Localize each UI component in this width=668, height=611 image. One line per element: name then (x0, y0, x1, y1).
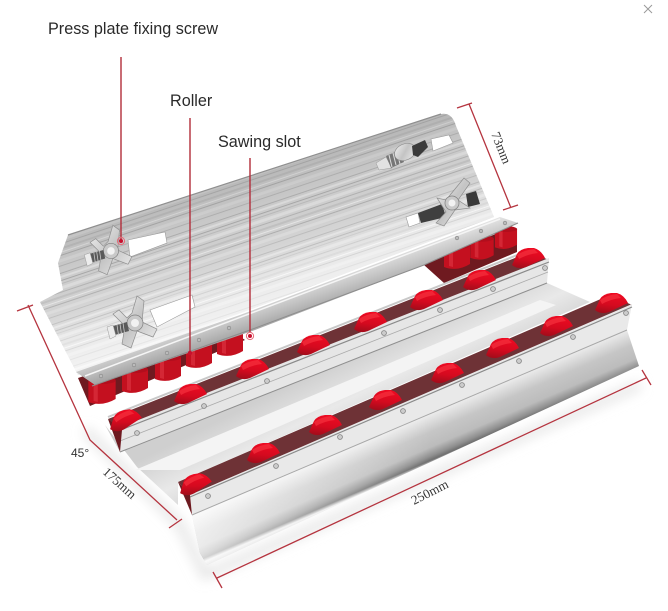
callout: sawing slot (218, 133, 301, 340)
front rail (178, 295, 632, 515)
slot opening (95, 268, 448, 418)
icon: wing screw 2 (107, 296, 157, 348)
label: 45 degrees: 45° (71, 446, 89, 460)
back rollers (88, 226, 517, 404)
icon: close cross (644, 5, 652, 13)
plate slots (128, 135, 453, 327)
base plate (105, 283, 590, 505)
lower folded face (192, 330, 639, 565)
dimension: 175mm with 45 degree bend: 175mm (100, 464, 140, 502)
icon: wing screw 3 (376, 140, 428, 170)
dimension: 250mm: 250mm (409, 476, 451, 508)
back rail (76, 217, 518, 386)
middle rail (108, 250, 549, 452)
middle rail rollers (108, 248, 545, 432)
dimension: 73mm (457, 103, 518, 210)
callout: press plate fixing screw (48, 20, 218, 245)
front rail rollers (178, 293, 628, 496)
callout: roller (170, 92, 213, 355)
callout: roller: Roller (170, 92, 213, 110)
panel: brushed back plate (40, 114, 494, 375)
back roller channel (78, 232, 517, 406)
callout: press plate fixing screw: Press plate fixing screw (48, 20, 218, 38)
dimension: 73mm: 73mm (488, 130, 515, 166)
soft shadow (85, 385, 640, 575)
product: saw guide (40, 114, 639, 565)
base plate highlight (135, 300, 556, 470)
icon: wing screw 1 (84, 225, 132, 275)
icon: wing screw 4 (418, 178, 480, 226)
dimension: 250mm (213, 370, 651, 588)
callout: sawing slot: Sawing slot (218, 133, 301, 151)
dimension: 175mm with 45 degree bend (17, 305, 182, 528)
